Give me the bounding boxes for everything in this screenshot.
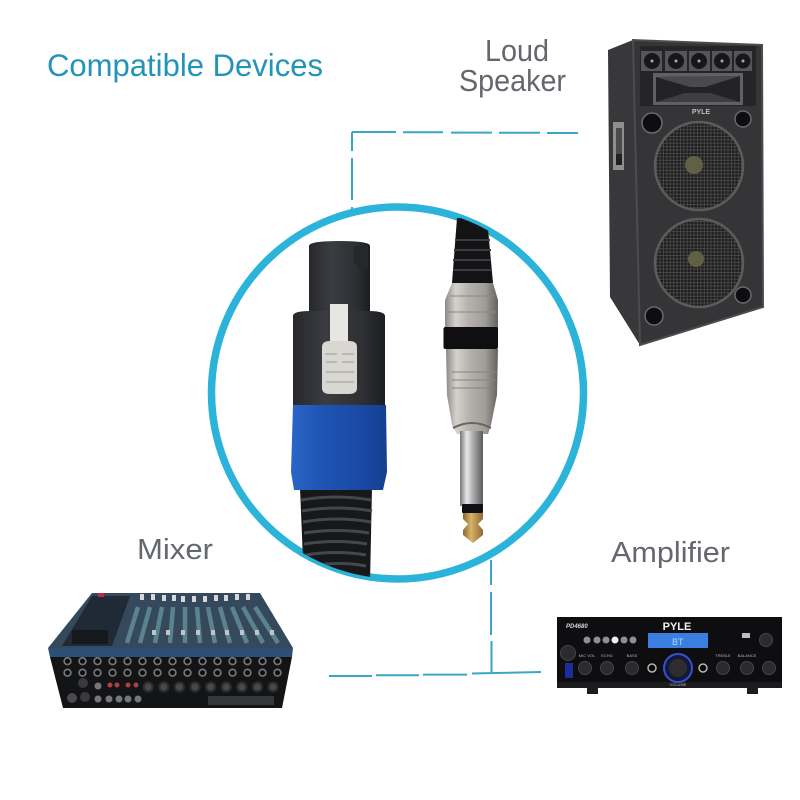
label: loud speaker: Loud [485, 33, 549, 68]
jack gold tip [463, 513, 483, 543]
label: amplifier: Amplifier [611, 537, 730, 569]
speakon cable [300, 488, 372, 583]
control labels: ECHO [601, 653, 613, 658]
amplifier lcd: BT [672, 637, 684, 647]
icon: circle ring [212, 207, 584, 579]
jack shaft [460, 431, 483, 506]
speakon body [293, 311, 385, 408]
mixer lower knobs [152, 630, 274, 635]
connector photo group [291, 218, 498, 583]
xlr row [140, 680, 281, 694]
control labels: MIC VOL [579, 653, 596, 658]
mixer print [208, 696, 274, 705]
blue power indicator [565, 663, 573, 678]
label: loud speaker [459, 33, 566, 98]
ports [642, 111, 751, 325]
red knob [98, 593, 104, 597]
amplifier body [557, 617, 782, 688]
jack black insulator [462, 504, 483, 513]
label: loud speaker: Speaker [459, 63, 566, 98]
speaker side panel [608, 40, 640, 345]
amplifier feet [587, 688, 758, 694]
mixer fader caps [140, 594, 250, 602]
speakon blue ring [291, 405, 387, 490]
icon: mixer [48, 593, 293, 708]
amplifier model: PD4680 [566, 624, 588, 630]
jack knurled collar [445, 283, 498, 330]
control labels: BALANCE [738, 653, 757, 658]
amplifier brand: PYLE [663, 621, 691, 633]
amplifier knobs [560, 634, 776, 674]
mixer blue rear strip [48, 648, 293, 657]
usb slot [742, 633, 750, 638]
jack black ring [444, 327, 498, 349]
jack barrel [446, 349, 498, 434]
title: Compatible Devices [47, 47, 323, 83]
mode buttons [584, 636, 636, 644]
mixer channel strips [127, 607, 278, 643]
tweeter row [641, 51, 752, 71]
speaker handle [613, 122, 624, 170]
control labels: TREBLE [715, 653, 731, 658]
speakon top cap [309, 241, 370, 312]
amplifier lcd [648, 633, 708, 648]
control labels: BASS [627, 653, 638, 658]
control labels: VOLUME [670, 682, 687, 687]
volume knob [664, 654, 692, 682]
icon: amplifier [557, 617, 782, 694]
speaker front face [633, 40, 763, 345]
control labels [579, 653, 757, 687]
dashed connector: mixer and amplifier [329, 560, 541, 676]
woofers [655, 122, 743, 307]
mic sockets [648, 664, 707, 672]
icon: loud speaker [608, 40, 763, 345]
jack rows [60, 656, 285, 678]
lower left connectors [67, 678, 142, 703]
jack cable [452, 218, 493, 283]
mixer rear panel [50, 657, 292, 708]
horn [653, 73, 743, 105]
mixer display block [72, 630, 108, 644]
speakon metal latch [322, 304, 357, 394]
mixer top panel [48, 593, 293, 648]
dashed connector: speaker [352, 132, 578, 212]
brand text: PYLE [692, 109, 710, 116]
label: mixer: Mixer [137, 534, 213, 566]
mixer left section [62, 596, 130, 646]
